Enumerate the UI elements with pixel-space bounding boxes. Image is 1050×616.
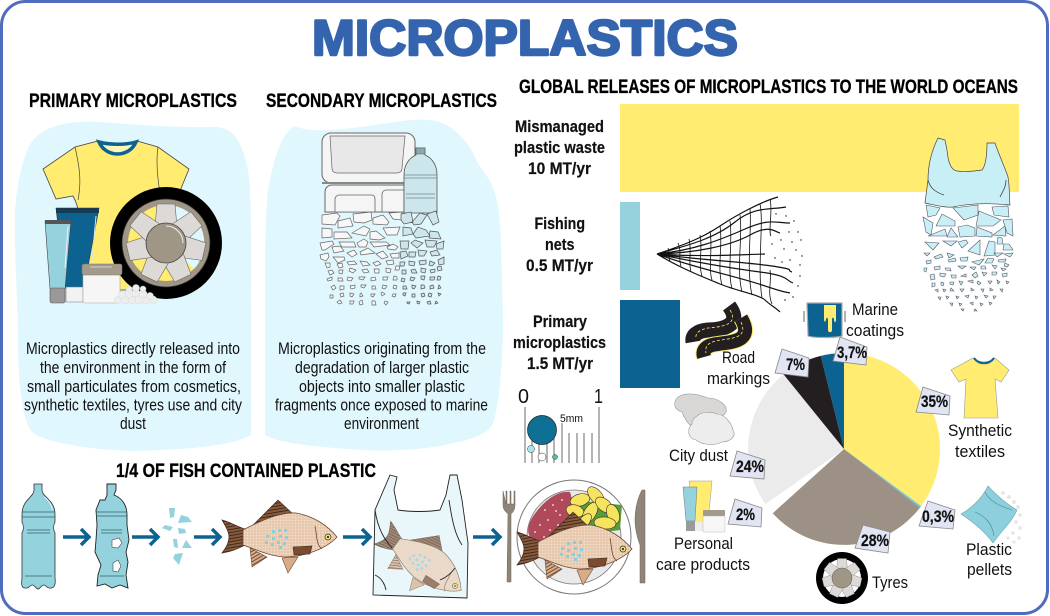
description: secondary: Microplastics originating from the [278, 340, 486, 358]
label: road markings [707, 349, 770, 388]
tag: 2% [728, 499, 762, 527]
description: primary: Microplastics directly released into [26, 340, 240, 358]
heading: fish contained plastic: 1/4 OF FISH CONTAINED PLASTIC [116, 461, 376, 482]
icon: fork [503, 491, 515, 582]
label: fishing nets: Fishing [534, 215, 585, 233]
icon: size scale: 5mm [560, 413, 583, 425]
slice: marine coatings [821, 353, 844, 449]
arrow: fish to bag [343, 529, 370, 545]
panel: primary microplastics [15, 91, 251, 451]
icon: size scale: 1 [594, 386, 603, 408]
label: fishing nets: nets [545, 236, 574, 254]
slice: city dust [748, 374, 844, 504]
tag: 28%: 28% [861, 532, 889, 550]
label: personal care products: Personal [674, 535, 733, 553]
description: secondary [275, 340, 488, 433]
label: primary microplastics: Primary [533, 313, 588, 331]
icon: plate of food [517, 480, 632, 594]
panel: fish food chain [22, 461, 645, 615]
description: secondary: objects into smaller plastic [299, 378, 465, 396]
background blob: primary [15, 122, 251, 451]
label: mismanaged plastic waste: Mismanaged [515, 118, 604, 136]
bar: fishing nets [620, 202, 640, 290]
label: personal care products: care products [656, 556, 750, 574]
arrow: crushed bottle to fragments [132, 529, 158, 545]
icon: degrading bottle [95, 484, 129, 588]
tag: 2%: 2% [736, 506, 755, 524]
description: secondary: environment [344, 415, 419, 433]
icon: fish with microplastics [222, 500, 337, 573]
icon: dark tube [56, 208, 99, 302]
description: primary: the environment in the form of [40, 359, 226, 377]
description: primary [24, 340, 243, 433]
title: MICROPLASTICS [312, 10, 738, 66]
tag: 0,3% [919, 501, 955, 529]
slice: synthetic textiles [844, 353, 940, 506]
description: secondary: fragments once exposed to marine [275, 396, 488, 414]
tag: 28% [855, 525, 890, 553]
slice: plastic pellets [844, 449, 921, 508]
arrow: bottle to crushed bottle [63, 529, 89, 545]
icon: water bottle [404, 148, 437, 213]
label: primary microplastics: microplastics [513, 334, 606, 352]
slice: tyres [773, 449, 920, 545]
tag: 24% [730, 451, 765, 479]
icon: knife [635, 490, 645, 583]
arrow: bag to plate [473, 529, 500, 545]
icon: small t-shirt [951, 358, 1009, 418]
icon: size scale [518, 386, 603, 463]
icon: bottle fragments [162, 508, 192, 565]
tag: 0,3%: 0,3% [922, 508, 954, 526]
label: personal care products [656, 535, 750, 574]
label: fishing nets: 0.5 MT/yr [526, 257, 594, 275]
label: road markings: markings [707, 370, 770, 388]
label: road markings: Road [722, 349, 755, 367]
tag: 35% [916, 387, 950, 415]
bar: primary microplastics [620, 300, 680, 388]
icon: cream jar [82, 264, 122, 303]
icon: personal care products [683, 481, 725, 532]
icon: plastic bag fragmenting [923, 138, 1013, 311]
heading: primary: PRIMARY MICROPLASTICS [29, 91, 237, 112]
label: fishing nets [526, 215, 594, 275]
icon: plastic pellets [114, 284, 157, 304]
description: secondary: degradation of larger plastic [295, 359, 469, 377]
fragments: container [320, 212, 402, 305]
tag: 3,7%: 3,7% [837, 344, 867, 362]
background blob: secondary [265, 120, 503, 451]
panel: global releases [513, 77, 1019, 463]
icon: size scale: 0 [518, 386, 529, 408]
label: plastic pellets: Plastic [966, 541, 1012, 559]
fragments: bottle [400, 211, 444, 304]
label: city dust: City dust [669, 447, 728, 465]
label: marine coatings: Marine [852, 301, 898, 319]
icon: paint can [804, 303, 845, 338]
label: marine coatings [846, 301, 904, 340]
label: tyres: Tyres [872, 574, 908, 592]
tag: 7% [775, 349, 809, 377]
arrow: fragments to fish [194, 529, 220, 545]
icon: tyre [110, 187, 222, 299]
slice: road markings [784, 356, 844, 449]
label: mismanaged plastic waste: plastic waste [514, 139, 605, 157]
label: primary microplastics: 1.5 MT/yr [527, 355, 594, 373]
icon: intact bottle [22, 484, 55, 589]
tag: 24%: 24% [736, 458, 764, 476]
icon: t-shirt [43, 141, 189, 290]
label: mismanaged plastic waste: 10 MT/yr [528, 160, 592, 178]
tag: 35%: 35% [921, 393, 948, 411]
label: marine coatings: coatings [846, 322, 904, 340]
icon: light tube [45, 220, 71, 303]
description: primary: small particulates from cosmetics, [27, 378, 241, 396]
label: primary microplastics [513, 313, 606, 373]
tag: 3,7% [833, 337, 867, 365]
label: plastic pellets [966, 541, 1012, 579]
label: mismanaged plastic waste [514, 118, 605, 178]
heading: secondary: SECONDARY MICROPLASTICS [266, 91, 497, 112]
icon: plastic pellets bag [961, 486, 1022, 544]
panel: secondary microplastics [265, 91, 503, 451]
icon: food container [322, 133, 415, 212]
label: plastic pellets: pellets [967, 561, 1012, 579]
icon: plastic bag with fish [364, 475, 480, 615]
pie chart: sources of primary microplastics [748, 353, 940, 545]
icon: city dust clouds [675, 394, 734, 444]
description: primary: synthetic textiles, tyres use and city [24, 396, 243, 414]
description: primary: dust [120, 415, 146, 433]
icon: road markings [693, 306, 745, 357]
label: synthetic textiles [948, 422, 1012, 461]
label: synthetic textiles: Synthetic [948, 422, 1012, 440]
tag: 7%: 7% [786, 356, 805, 374]
icon: fishing net [657, 197, 803, 312]
bar: mismanaged plastic waste [620, 104, 1019, 192]
label: synthetic textiles: textiles [955, 443, 1005, 461]
icon: small tyre [816, 552, 868, 604]
